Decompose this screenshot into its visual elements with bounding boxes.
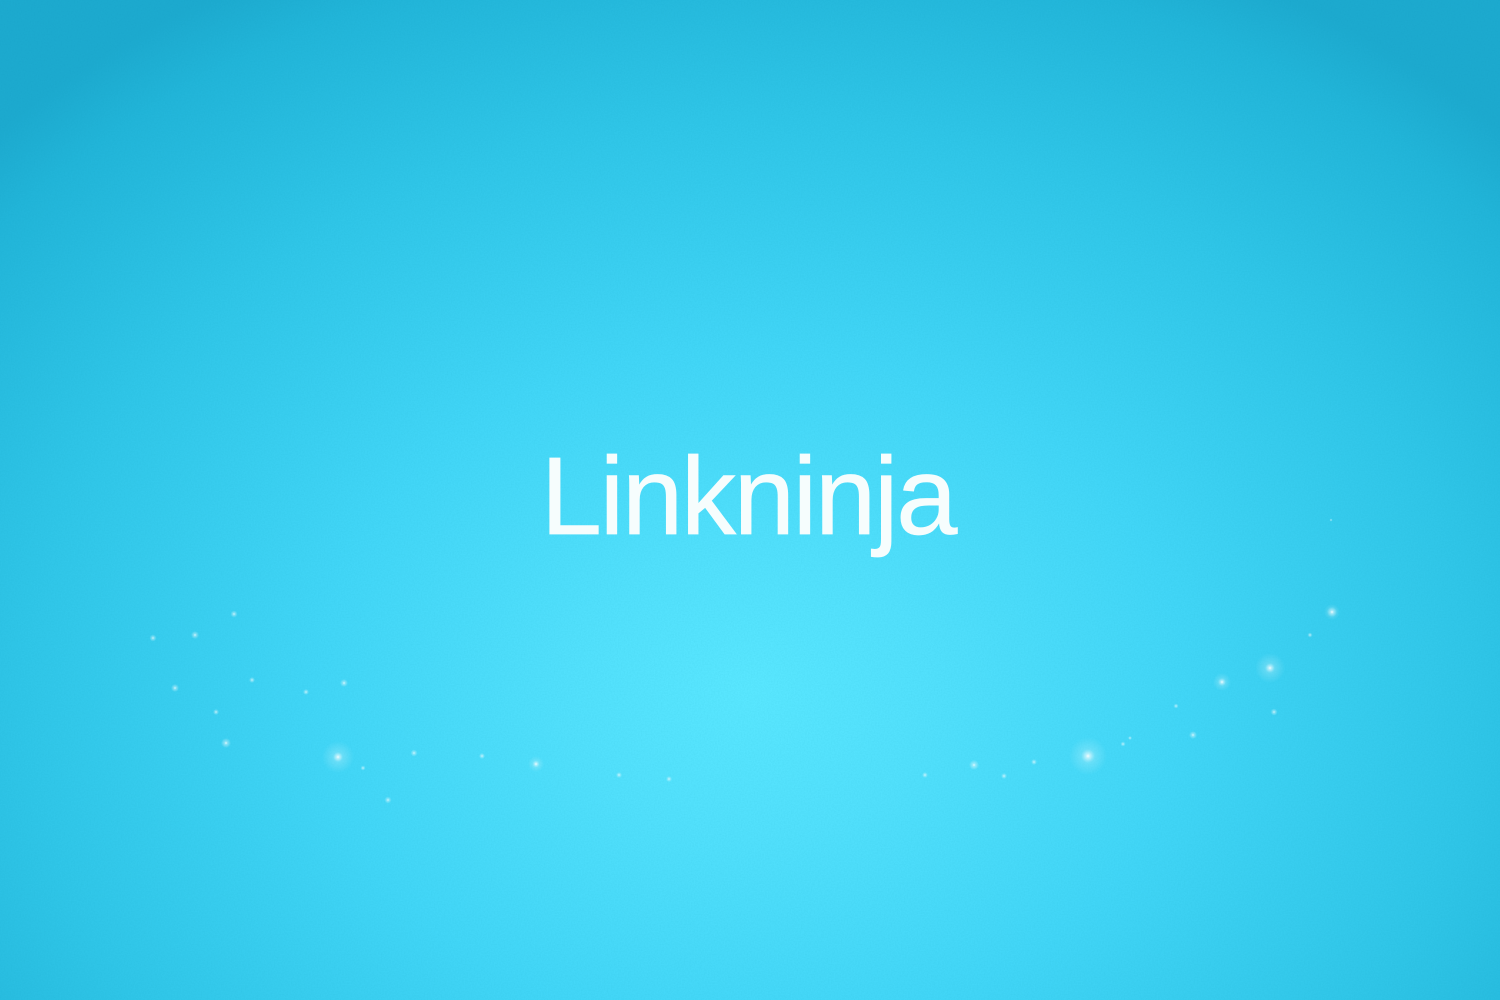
title: Linkninja [541, 435, 955, 558]
